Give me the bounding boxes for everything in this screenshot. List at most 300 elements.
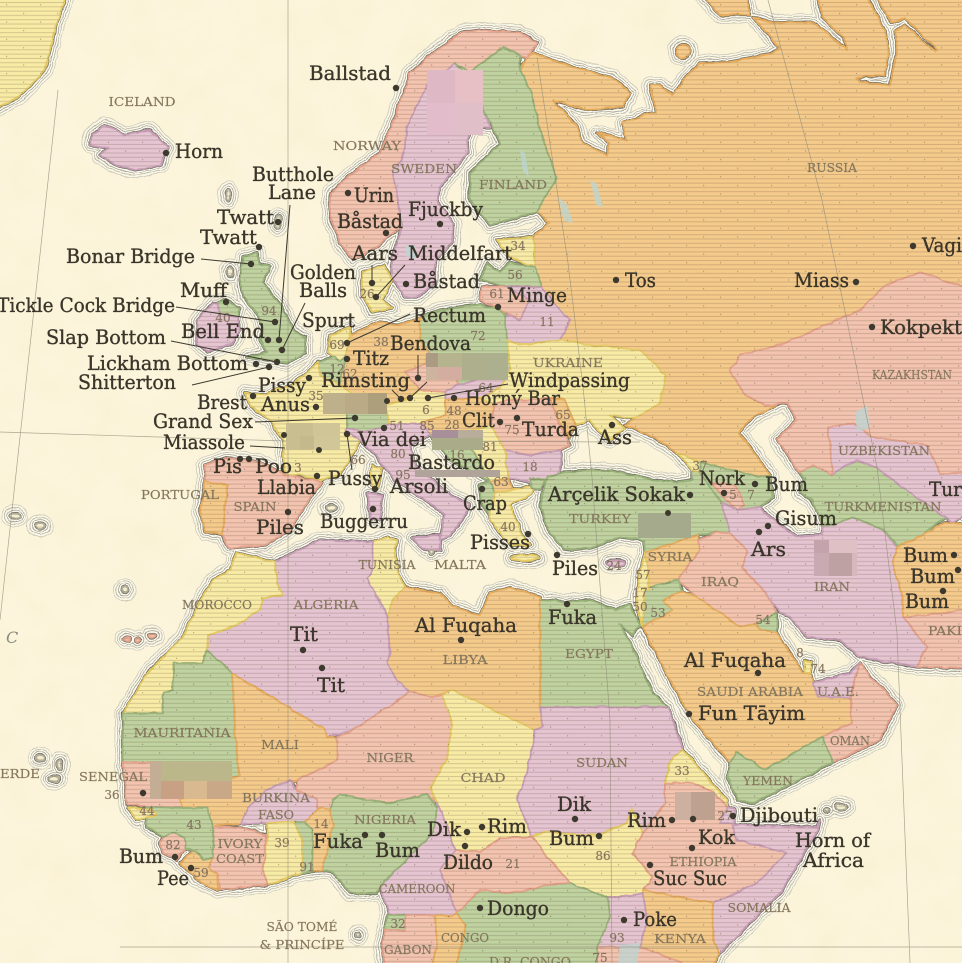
place: golden balls: Golden xyxy=(290,260,356,284)
place: pissy: Pissy xyxy=(258,373,307,397)
country: equatorial guinea xyxy=(385,915,405,930)
place: dik sudan: Dik xyxy=(557,792,592,816)
country: northern ireland xyxy=(217,300,240,317)
name: malta: MALTA xyxy=(434,558,486,572)
country: syria xyxy=(645,535,700,590)
country reference numbers: 3 xyxy=(294,461,302,475)
place: golden balls xyxy=(279,260,356,353)
country reference numbers: 61 xyxy=(489,287,505,301)
place: rim chad: Rim xyxy=(487,814,527,838)
place: tit north: Tit xyxy=(290,622,318,646)
place: buggerru: Buggerru xyxy=(320,509,408,533)
place: butthole lane: Lane xyxy=(268,180,316,204)
country reference numbers: 6 xyxy=(422,403,430,417)
place: turda: Turda xyxy=(522,417,579,441)
name: turkmenistan: TURKMENISTAN xyxy=(824,500,942,514)
place: bum sierra leone: Bum xyxy=(119,844,163,868)
name: ivory coast: COAST xyxy=(216,852,264,866)
country: uzbekistan xyxy=(828,423,962,523)
place: slap bottom xyxy=(46,325,280,365)
country: guinea xyxy=(147,807,213,860)
country: switzerland xyxy=(347,398,390,432)
place: tickle cock bridge: Tickle Cock Bridge xyxy=(0,293,175,317)
country reference numbers: 28 xyxy=(444,418,460,432)
country reference numbers: 16 xyxy=(449,448,465,462)
name: iran: IRAN xyxy=(814,580,850,594)
country: uae xyxy=(813,663,860,697)
country reference numbers: 74 xyxy=(810,662,826,676)
country: kazakhstan xyxy=(730,272,962,475)
country reference numbers: 40 xyxy=(500,520,516,534)
place: piles spain: Piles xyxy=(256,515,304,539)
pixelated patch: france north xyxy=(323,393,387,414)
place: poke: Poke xyxy=(633,907,677,931)
name: burkina faso: BURKINA xyxy=(242,791,310,805)
country reference numbers: 14 xyxy=(313,817,329,831)
country: sicily xyxy=(412,535,440,550)
country: south sudan xyxy=(532,808,653,898)
place: ballstad: Ballstad xyxy=(309,61,391,85)
place: suc suc: Suc Suc xyxy=(653,866,727,890)
country: iceland xyxy=(90,125,168,170)
place: grand sex: Grand Sex xyxy=(153,409,254,433)
country: bulgaria xyxy=(505,450,562,482)
name: russia: RUSSIA xyxy=(807,161,857,175)
name: sao tome and principe: & PRINCÍPE xyxy=(260,937,344,952)
country reference numbers: 26 xyxy=(359,287,375,301)
place: bendova xyxy=(390,331,471,381)
country: djibouti xyxy=(720,807,735,823)
place: bastad sweden: Båstad xyxy=(413,269,480,293)
place: poo: Poo xyxy=(255,454,292,478)
place: fjuckby: Fjuckby xyxy=(408,197,484,221)
place: crap: Crap xyxy=(463,491,507,515)
country reference numbers: 40 xyxy=(215,311,231,325)
country reference numbers: 69 xyxy=(329,338,345,352)
place: urin: Urin xyxy=(354,183,394,207)
name: libya: LIBYA xyxy=(442,653,488,667)
place: fun tayim: Fun Tāyim xyxy=(698,701,805,725)
country: chad xyxy=(430,690,535,852)
country: libya xyxy=(387,587,543,730)
place: rectum: Rectum xyxy=(413,303,486,327)
place: windpassing xyxy=(425,368,630,401)
country reference numbers: 33 xyxy=(674,764,690,778)
place: middelfart: Middelfart xyxy=(408,241,512,265)
country: central african republic xyxy=(440,837,570,913)
place: al fuqaha libya: Al Fuqaha xyxy=(414,613,517,637)
place: miassole: Miassole xyxy=(163,430,245,454)
place: tos xyxy=(613,268,656,292)
place: senegal marker xyxy=(140,790,146,796)
country: mali xyxy=(180,673,337,827)
country reference numbers: 11 xyxy=(539,315,555,329)
country: somalia xyxy=(713,820,820,953)
name: congo: CONGO xyxy=(441,931,489,945)
country reference numbers: 38 xyxy=(373,335,389,349)
place: horn: Horn xyxy=(175,139,223,163)
country reference numbers: 54 xyxy=(755,613,771,627)
place: arcelik sokak xyxy=(547,482,693,516)
lakes xyxy=(405,150,870,963)
place: horn of africa: Horn of xyxy=(795,828,872,852)
place: ars: Ars xyxy=(750,537,786,561)
country: bosnia xyxy=(430,435,490,482)
country: congo xyxy=(430,913,465,963)
ocean letter: C xyxy=(6,628,18,647)
country: benin xyxy=(305,807,333,872)
country reference numbers: 21 xyxy=(505,857,521,871)
country reference numbers: 36 xyxy=(104,788,120,802)
name: spain: SPAIN xyxy=(234,500,276,514)
country: poland xyxy=(420,305,510,385)
place: gisum: Gisum xyxy=(775,506,837,530)
place: pee: Pee xyxy=(157,866,189,890)
country: guinea-bissau xyxy=(128,808,157,820)
name: turkey: TURKEY xyxy=(569,512,632,526)
name: chad: CHAD xyxy=(460,771,506,785)
place: tit south: Tit xyxy=(317,673,345,697)
name: burkina faso xyxy=(242,791,310,822)
country: turkmenistan xyxy=(800,460,945,547)
country: portugal xyxy=(200,482,228,535)
country: austria xyxy=(385,390,445,425)
pixelated patch: turkey xyxy=(638,513,691,538)
country reference numbers: 56 xyxy=(507,268,523,282)
name: kenya: KENYA xyxy=(654,932,706,946)
country: pakistan xyxy=(903,607,962,668)
name: syria: SYRIA xyxy=(648,550,693,564)
country reference numbers: 66 xyxy=(350,453,366,467)
place: miassole xyxy=(163,430,322,454)
name: norway: NORWAY xyxy=(333,139,402,153)
country reference numbers: 51 xyxy=(389,419,405,433)
country: oman xyxy=(822,663,897,762)
name: gabon: GABON xyxy=(384,943,432,957)
country: iraq xyxy=(678,532,777,627)
place: rectum xyxy=(344,303,486,346)
place: rimsting: Rimsting xyxy=(321,368,410,392)
pixelated patch: west africa xyxy=(150,761,232,799)
place: butthole lane xyxy=(252,162,334,343)
country reference numbers: 27 xyxy=(717,809,733,823)
place: golden balls: Balls xyxy=(299,278,347,302)
name: algeria: ALGERIA xyxy=(292,598,359,612)
country: nigeria xyxy=(323,795,437,893)
country: north macedonia xyxy=(490,478,512,493)
place: bastardo: Bastardo xyxy=(408,450,495,474)
country: moldova xyxy=(550,398,575,438)
country reference numbers: 93 xyxy=(609,931,625,945)
place: ass: Ass xyxy=(597,425,632,449)
name: sao tome and principe: SÃO TOMÉ xyxy=(266,919,338,934)
pixelated patch: iran xyxy=(814,540,857,576)
name: sao tome and principe xyxy=(260,919,344,952)
country reference numbers: 24 xyxy=(606,559,622,573)
name: morocco: MOROCCO xyxy=(182,598,252,612)
name: mauritania: MAURITANIA xyxy=(134,726,231,740)
name: mali: MALI xyxy=(261,738,299,752)
pixelated patch: sweden xyxy=(427,70,483,135)
country: ivory coast xyxy=(208,827,267,890)
country: mauritania xyxy=(123,650,240,800)
country: uganda xyxy=(597,893,647,947)
country: denmark xyxy=(362,265,392,312)
place: horn of africa: Africa xyxy=(802,848,864,872)
place: piles greece: Piles xyxy=(552,556,598,580)
country: kuwait xyxy=(757,613,777,633)
country: corsica xyxy=(371,465,382,488)
country reference numbers: 59 xyxy=(193,866,209,880)
country: turkey xyxy=(540,470,730,553)
place: tos: Tos xyxy=(625,268,656,292)
place: rim ethiopia: Rim xyxy=(627,808,666,832)
country: cameroon xyxy=(380,803,457,917)
country reference numbers: 95 xyxy=(395,468,411,482)
country: albania xyxy=(479,482,495,515)
country reference numbers: 64 xyxy=(478,381,494,395)
name: pakistan: PAKI xyxy=(928,624,962,638)
country reference numbers: 12 xyxy=(329,362,345,376)
place: fuka egypt: Fuka xyxy=(548,605,597,629)
country reference numbers: 65 xyxy=(555,408,571,422)
country: iran xyxy=(722,503,927,667)
place: dik chad: Dik xyxy=(427,817,462,841)
country: russian arctic island xyxy=(697,0,750,15)
place: pussy xyxy=(328,431,383,490)
country: gabon xyxy=(382,915,437,963)
place: windpassing: Windpassing xyxy=(509,368,630,392)
place: bum afghanistan three: Bum xyxy=(905,589,949,613)
place: fuka nigeria: Fuka xyxy=(313,829,363,853)
name: cameroon: CAMEROON xyxy=(378,882,456,896)
country reference numbers: 75 xyxy=(504,423,520,437)
islands xyxy=(10,189,847,937)
place: brest: Brest xyxy=(197,390,247,414)
country: lithuania xyxy=(480,287,530,320)
place: shitterton xyxy=(78,364,272,394)
place: pis: Pis xyxy=(213,454,242,478)
country: turkish thrace xyxy=(530,478,545,490)
country: saudi arabia xyxy=(642,592,852,770)
country: finland xyxy=(455,47,557,225)
country reference numbers: 50 xyxy=(632,600,648,614)
country reference numbers: 43 xyxy=(186,818,202,832)
name: portugal: PORTUGAL xyxy=(141,488,219,502)
pixelated patch: eritrea and ethiopia xyxy=(675,792,715,820)
place: bendova: Bendova xyxy=(390,331,471,355)
country reference numbers: 63 xyxy=(493,475,509,489)
country: kolguyev island xyxy=(676,44,690,58)
name: oman: OMAN xyxy=(830,734,870,748)
name: uzbekistan: UZBEKISTAN xyxy=(838,444,930,458)
place: rimsting xyxy=(321,368,427,404)
country: afghanistan xyxy=(893,522,962,617)
name: saudi arabia: SAUDI ARABIA xyxy=(697,685,803,699)
country: ghana xyxy=(263,822,302,885)
country: latvia xyxy=(480,262,542,287)
place: kokpekt: Kokpekt xyxy=(880,315,962,339)
place: bum afghanistan one: Bum xyxy=(903,543,948,567)
name: ukraine: UKRAINE xyxy=(533,356,603,370)
pixelated patch: france south xyxy=(286,423,340,450)
place: twatt orkney: Twatt xyxy=(200,225,257,249)
name: egypt: EGYPT xyxy=(565,647,613,661)
country reference numbers: 17 xyxy=(632,586,648,600)
country: kenya xyxy=(640,890,720,963)
place: slap bottom: Slap Bottom xyxy=(46,325,166,349)
name: sweden: SWEDEN xyxy=(391,162,457,176)
place: horn of africa xyxy=(795,828,872,872)
place: dongo: Dongo xyxy=(487,896,549,920)
country reference numbers: 39 xyxy=(274,836,290,850)
place: middelfart xyxy=(373,241,512,300)
country reference numbers: 48 xyxy=(446,404,462,418)
place: al fuqaha saudi arabia: Al Fuqaha xyxy=(683,648,786,672)
name: somalia: SOMALIA xyxy=(728,901,791,915)
country: ukraine xyxy=(480,340,665,440)
country reference numbers: 57 xyxy=(635,568,651,582)
place: via dei: Via dei xyxy=(357,427,426,451)
place: clit: Clit xyxy=(462,408,495,432)
country: germany xyxy=(340,318,428,405)
name: cape verde: ERDE xyxy=(0,767,40,781)
name: senegal: SENEGAL xyxy=(79,770,147,784)
country: romania xyxy=(490,398,570,455)
country: ethiopia xyxy=(632,783,787,903)
name: ivory coast xyxy=(216,837,264,866)
country: tunisia xyxy=(367,537,405,617)
place: bell end: Bell End xyxy=(181,319,265,343)
name: yemen: YEMEN xyxy=(742,774,793,788)
country: belgium xyxy=(318,355,345,385)
country reference numbers: 35 xyxy=(308,389,324,403)
country: ireland xyxy=(197,303,240,352)
place: aars xyxy=(351,241,398,286)
name: burkina faso: FASO xyxy=(258,808,294,822)
country reference numbers: 91 xyxy=(299,860,315,874)
country: slovakia xyxy=(445,370,510,400)
country reference numbers: 37 xyxy=(692,459,708,473)
country: yemen xyxy=(728,737,833,803)
name: niger: NIGER xyxy=(366,751,415,765)
country: egypt xyxy=(540,600,668,707)
country: azerbaijan xyxy=(700,462,773,510)
country: jordan xyxy=(642,580,682,627)
country: hungary xyxy=(420,398,495,435)
place: spurt: Spurt xyxy=(302,308,355,332)
country reference numbers: 7 xyxy=(747,488,755,502)
name: finland: FINLAND xyxy=(479,178,547,192)
place: pisses: Pisses xyxy=(470,530,530,554)
name: uae: U.A.E. xyxy=(817,685,859,699)
country: greenland xyxy=(0,0,68,112)
country: morocco and western sahara xyxy=(123,553,283,713)
place: pussy: Pussy xyxy=(328,466,383,490)
place: nork: Nork xyxy=(699,466,746,490)
country: dr congo xyxy=(455,883,610,963)
country reference numbers: 86 xyxy=(595,849,611,863)
country: qatar xyxy=(805,660,811,674)
place: bum afghanistan two: Bum xyxy=(910,564,955,588)
country: senegal xyxy=(123,762,183,808)
place: ethiopia marker xyxy=(690,816,696,822)
country: eritrea xyxy=(665,750,728,807)
country: niger xyxy=(297,692,452,810)
place: minge: Minge xyxy=(507,283,567,307)
place: bum nigeria: Bum xyxy=(375,838,420,862)
country: spain xyxy=(205,458,322,548)
place: titz: Titz xyxy=(353,346,389,370)
country: togo xyxy=(293,822,313,873)
place: bum sudan: Bum xyxy=(549,826,594,850)
country: tanzania xyxy=(597,947,708,963)
country: russia xyxy=(520,0,962,477)
place: shitterton: Shitterton xyxy=(78,370,176,394)
country reference numbers: 94 xyxy=(261,304,277,318)
name: sudan: SUDAN xyxy=(576,756,628,770)
place: tickle cock bridge xyxy=(0,293,278,325)
name: iceland: ICELAND xyxy=(108,95,176,109)
place: dildo: Dildo xyxy=(443,850,493,874)
name: ethiopia: ETHIOPIA xyxy=(670,855,737,869)
country: liberia xyxy=(180,848,218,890)
place: miass: Miass xyxy=(794,268,849,292)
country reference numbers: 5 xyxy=(729,488,737,502)
pixelated patch: balkans xyxy=(415,430,500,477)
country: italy xyxy=(345,423,470,540)
place: arsoli: Arsoli xyxy=(389,474,448,498)
country: serbia xyxy=(460,425,508,482)
country reference numbers: 32 xyxy=(390,917,406,931)
country: sweden xyxy=(392,63,490,297)
country: israel and lebanon xyxy=(636,553,650,627)
country: greece xyxy=(490,485,535,545)
pixelated patch: poland and czechia xyxy=(426,353,508,380)
place: grand sex xyxy=(153,409,358,433)
place: bum azerbaijan: Bum xyxy=(765,472,808,496)
country reference numbers: 82 xyxy=(165,838,181,852)
country: georgia xyxy=(677,453,700,472)
country reference numbers: 81 xyxy=(482,440,498,454)
name: kazakhstan: KAZAKHSTAN xyxy=(872,368,952,382)
country: estonia xyxy=(497,237,535,267)
name: iraq: IRAQ xyxy=(701,575,739,589)
place: twatt shetland: Twatt xyxy=(217,205,274,229)
country: czechia xyxy=(405,352,458,392)
place: lickham bottom: Lickham Bottom xyxy=(87,351,248,375)
place: muff: Muff xyxy=(180,278,229,302)
place: anus: Anus xyxy=(260,392,310,416)
place: djibouti: Djibouti xyxy=(740,803,818,827)
country: netherlands xyxy=(328,327,350,362)
country reference numbers: 72 xyxy=(470,329,486,343)
country: scotland, england and wales xyxy=(240,253,305,363)
place: horny bar: Horný Bar xyxy=(465,386,560,410)
name: ivory coast: IVORY xyxy=(218,837,264,851)
place: arcelik sokak: Arçelik Sokak xyxy=(547,482,686,506)
country reference numbers: 85 xyxy=(419,419,435,433)
country reference numbers: 18 xyxy=(522,460,538,474)
place: llabia: Llabia xyxy=(257,475,316,499)
country: belarus xyxy=(505,287,570,345)
place: minge xyxy=(495,283,567,310)
country reference numbers: 8 xyxy=(796,646,804,660)
place: butthole lane: Butthole xyxy=(252,162,334,186)
country reference numbers: 80 xyxy=(390,447,406,461)
country: sierra leone xyxy=(160,832,185,860)
name: nigeria: NIGERIA xyxy=(354,813,416,827)
